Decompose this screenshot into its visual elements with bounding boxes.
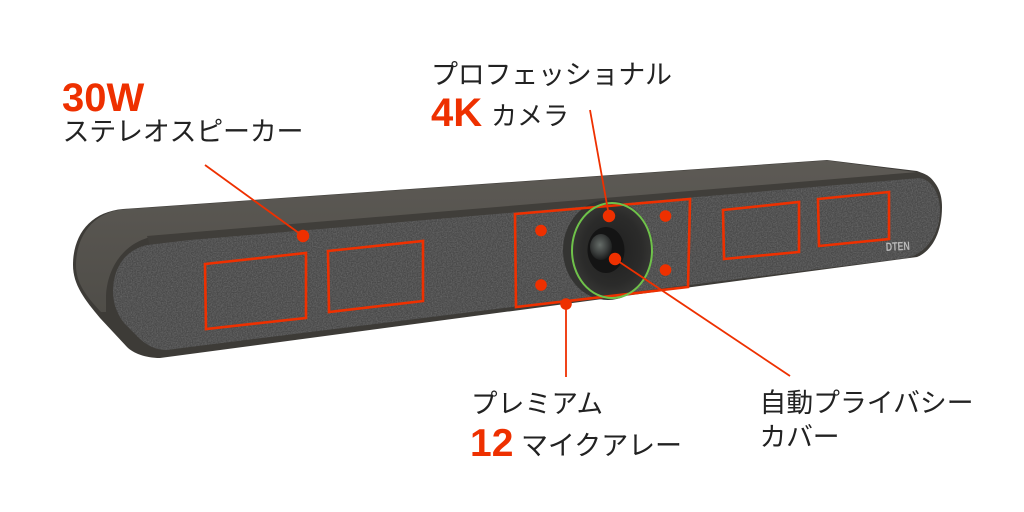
microphone dot lower right [660, 264, 671, 276]
fabric front panel [113, 178, 940, 350]
device outer shell [73, 160, 942, 358]
speaker outlines [205, 192, 889, 329]
label: privacy cover [760, 388, 974, 452]
callout dots [297, 210, 671, 310]
speaker box 3 [723, 202, 799, 259]
privacy cover leader line [615, 259, 790, 376]
microphone dot upper left [535, 225, 547, 236]
label: camera: カメラ [491, 101, 569, 131]
label: privacy cover: 自動プライバシー [760, 388, 974, 418]
soundbar device [73, 160, 950, 360]
label: speaker: 30W [62, 76, 144, 120]
camera inner ring [573, 204, 651, 296]
lens cover dot [609, 253, 621, 265]
front lip band [147, 172, 938, 246]
array anchor dot [560, 298, 572, 310]
callout lines [205, 110, 790, 377]
label: camera: 4K [431, 91, 482, 135]
microphone dot lower left [535, 279, 547, 291]
speaker box 1 [205, 253, 306, 329]
label: speaker [62, 76, 304, 147]
microphone leader line [565, 304, 567, 377]
camera leader line [590, 110, 609, 216]
camera lens recess [588, 227, 624, 273]
label: speaker: ステレオスピーカー [62, 117, 304, 147]
microphone array outline [515, 199, 690, 307]
speaker box 2 [328, 241, 423, 312]
label: microphones [470, 389, 682, 465]
label: camera [431, 60, 672, 135]
camera housing [563, 200, 653, 300]
label: camera: プロフェッショナル [431, 60, 672, 90]
speaker dot [297, 230, 309, 242]
label: privacy cover: カバー [760, 422, 840, 452]
microphone dot upper right [660, 210, 671, 222]
camera lens glass [590, 234, 612, 260]
camera highlight ring [572, 203, 652, 298]
microphone dot top centre [603, 210, 615, 222]
speaker box 4 [818, 192, 889, 246]
label: microphones: プレミアム [471, 389, 603, 419]
label: microphones: マイクアレー [521, 431, 682, 461]
DTEN logo: DTEN [885, 239, 910, 254]
speaker leader line [205, 165, 303, 236]
label: microphones: 12 [470, 422, 513, 465]
device top surface [76, 160, 934, 312]
